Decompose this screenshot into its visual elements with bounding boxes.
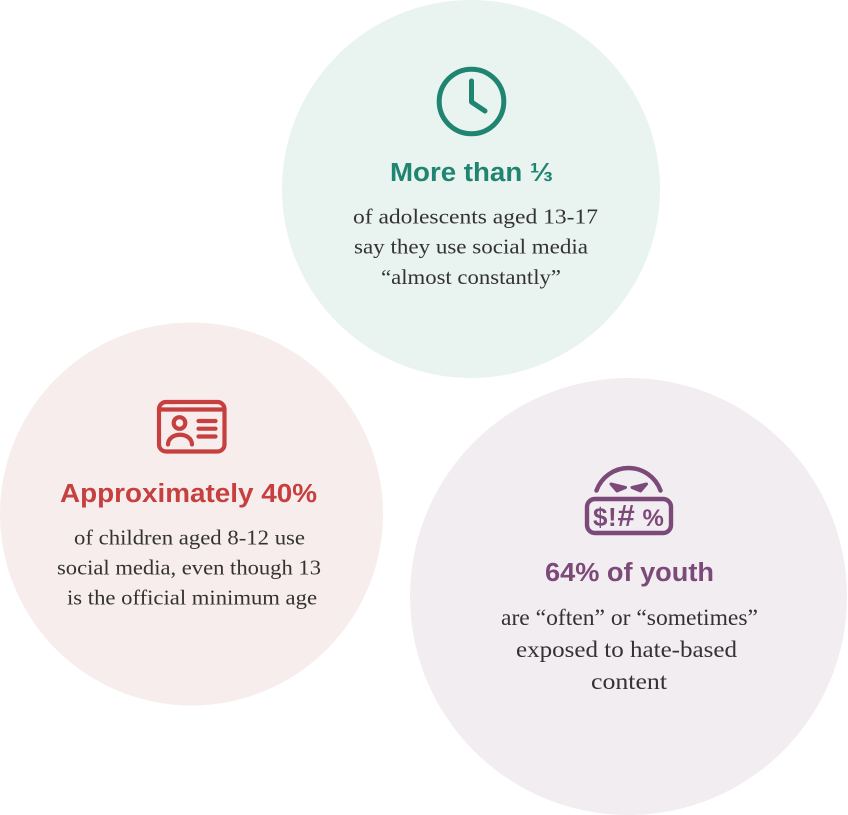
panel: approximately 40 percent [0, 322, 383, 706]
text block: adolescents: “almost constantly” [381, 265, 561, 289]
text block: adolescents: of adolescents aged 13-17 [353, 204, 598, 228]
heading: more than a third: More than ⅓ [390, 159, 553, 187]
text block: adolescents [353, 204, 598, 289]
text block: hate-based content: are “often” or “sometimes” [501, 605, 758, 631]
icon: angry face with censored symbols: % [642, 505, 664, 532]
text block: children [57, 526, 321, 610]
heading: approximately 40 percent: Approximately 40% [60, 480, 317, 508]
icon: angry face with censored symbols: ! [608, 502, 617, 532]
text block: hate-based content: exposed to hate-based [516, 637, 737, 663]
text block: children: is the official minimum age [67, 586, 317, 610]
icon: clock [439, 69, 504, 134]
text block: hate-based content: content [591, 669, 668, 695]
panel: 64 percent of youth [410, 378, 847, 815]
icon: angry face with censored symbols: $ [593, 502, 608, 532]
icon: id card [159, 402, 224, 452]
panel: more than a third [282, 0, 660, 378]
icon: angry face with censored symbols [587, 468, 671, 533]
text block: children: social media, even though 13 [57, 556, 321, 580]
text block: children: of children aged 8-12 use [74, 526, 305, 550]
heading: 64 percent of youth: 64% of youth [545, 559, 714, 587]
text block: hate-based content [501, 605, 758, 695]
text block: adolescents: say they use social media [354, 234, 588, 258]
icon: angry face with censored symbols: # [618, 498, 635, 533]
